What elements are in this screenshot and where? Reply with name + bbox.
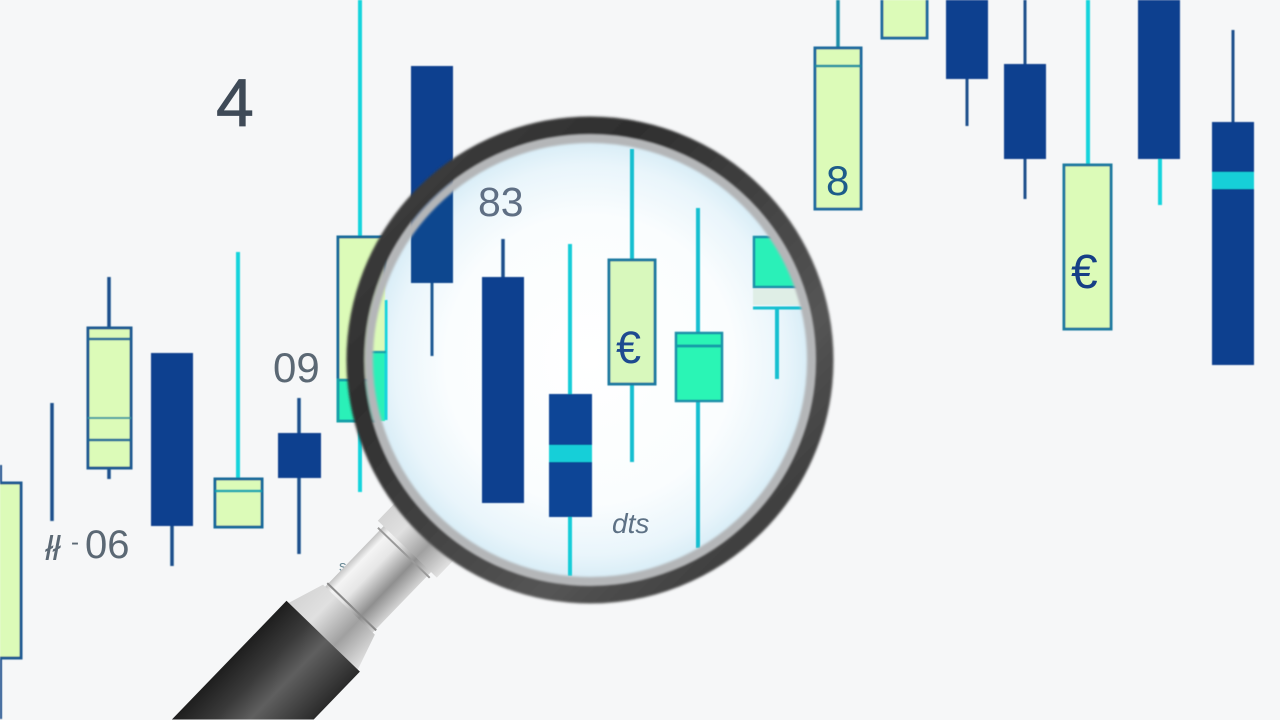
label fragment: s near handle: s xyxy=(339,558,346,575)
candle: edge light green xyxy=(0,465,22,719)
handle: narrow silver tube xyxy=(323,521,437,635)
candle: navy long top xyxy=(1138,0,1180,205)
magnifier ring xyxy=(356,126,824,594)
magnifier lens contents xyxy=(371,142,808,578)
lens: navy tall candle xyxy=(482,239,524,503)
handle: lens collar flange xyxy=(377,527,430,579)
number label: -06: 06 xyxy=(85,523,130,567)
number label: 09: 09 xyxy=(273,344,320,391)
number label: -06: - xyxy=(71,529,79,556)
euro symbol: € xyxy=(1071,246,1098,299)
handle: lens collar xyxy=(378,498,458,578)
ring dark frame xyxy=(356,126,824,594)
lens label: dts: dts xyxy=(612,508,649,539)
handle: metal neck xyxy=(289,494,463,670)
lens: teal candle xyxy=(676,208,722,548)
left candlesticks xyxy=(0,0,453,719)
candle: light green top xyxy=(882,0,927,38)
number label: 8: 8 xyxy=(826,157,849,204)
number label: -06: łł xyxy=(45,530,62,568)
candle: light green with 8 xyxy=(815,0,861,209)
handle: grip collar xyxy=(289,576,383,670)
candle: light green short with cyan wick xyxy=(215,252,262,527)
lens: light green candle at left edge xyxy=(371,286,388,422)
handle: black grip xyxy=(172,601,360,720)
lens: teal candle at right edge xyxy=(752,234,803,380)
lens: navy candle with cyan band xyxy=(549,244,592,576)
lens: navy candle upper left xyxy=(411,66,453,356)
candle: navy tall xyxy=(151,353,193,566)
magnifying glass handle xyxy=(172,494,463,720)
candle: navy with cyan band xyxy=(1212,30,1254,365)
candle: navy short xyxy=(278,398,321,554)
candle: navy middle xyxy=(1004,0,1046,199)
ring inner bevel xyxy=(369,139,811,581)
candle: light green with bands xyxy=(88,277,131,479)
candle: light green behind lens xyxy=(338,0,385,492)
candle: navy top xyxy=(946,0,988,126)
candle: navy behind lens xyxy=(411,66,453,356)
candle: light green with euro xyxy=(1064,0,1111,329)
handle: grip collar flange xyxy=(327,582,377,631)
top-right candlesticks xyxy=(815,0,1254,365)
lens number label: 83: 83 xyxy=(478,179,524,225)
glass fill xyxy=(368,138,812,582)
wick: navy line xyxy=(50,403,54,521)
number label: 4: 4 xyxy=(216,65,254,141)
magnified candlesticks xyxy=(371,148,803,576)
lens euro symbol: € xyxy=(616,322,641,373)
lens: light green candle with euro xyxy=(609,149,655,462)
